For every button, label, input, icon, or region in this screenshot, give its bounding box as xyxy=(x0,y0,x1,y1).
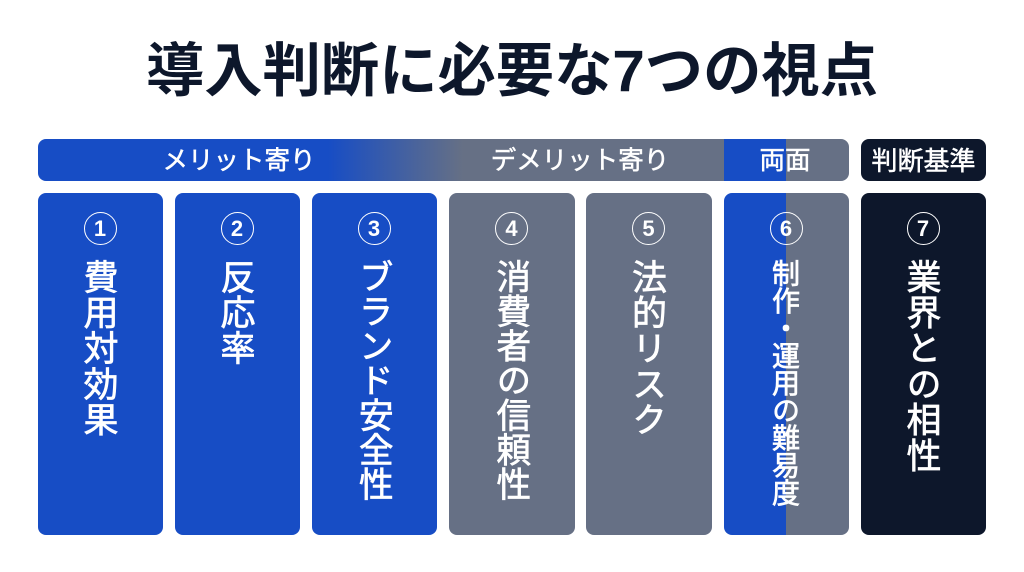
card 7 xyxy=(861,193,986,535)
category bar: merit to demerit and both xyxy=(38,139,849,181)
card 7: 7 xyxy=(917,216,929,241)
label: criterion xyxy=(861,139,986,181)
card 1 xyxy=(38,193,163,535)
card 6: 6 xyxy=(780,216,792,241)
card 3: 3 xyxy=(368,216,380,241)
label: both: 両面 xyxy=(759,147,810,175)
card 5 xyxy=(586,193,712,535)
label: demerit: デメリット寄り xyxy=(491,147,669,175)
card 4 xyxy=(449,193,575,535)
card 4: 4 xyxy=(505,216,518,241)
label: criterion: 判断基準 xyxy=(871,146,976,176)
card 1: 1 xyxy=(94,216,106,241)
card 2 xyxy=(175,193,300,535)
card 2: 反応率 xyxy=(216,259,254,366)
card 3 xyxy=(312,193,437,535)
card 5: 法的リスク xyxy=(627,259,666,438)
label: merit: メリット寄り xyxy=(162,147,316,175)
card 6 xyxy=(724,193,849,535)
card 2: 2 xyxy=(231,216,243,241)
title: 導入判断に必要な7つの視点 xyxy=(146,39,878,104)
card 7: 業界との相性 xyxy=(902,259,940,473)
card 1: 費用対効果 xyxy=(78,259,118,438)
card 3: ブランド安全性 xyxy=(353,259,391,501)
card 4: 消費者の信頼性 xyxy=(491,259,529,501)
card 5: 5 xyxy=(642,216,655,241)
card 6: 制作・運用の難易度 xyxy=(769,259,800,506)
